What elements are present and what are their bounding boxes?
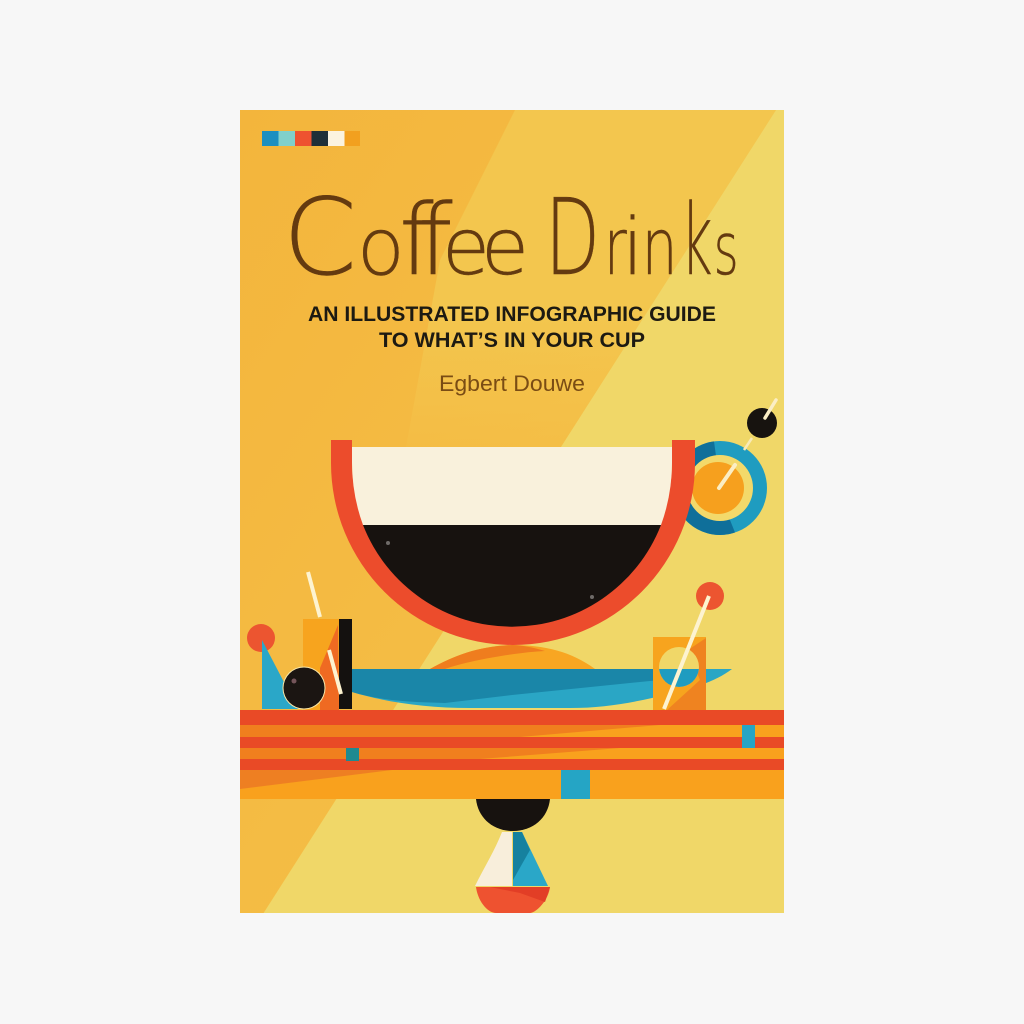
title: C [283, 176, 357, 299]
cup rim [331, 440, 695, 645]
black ball [282, 666, 326, 710]
sail right dark [513, 832, 530, 880]
title: f [418, 184, 453, 298]
cup [331, 440, 695, 669]
coffee [363, 525, 661, 627]
author: Egbert Douwe [439, 371, 585, 396]
milk foam [352, 447, 672, 525]
table stripes [240, 710, 784, 799]
blue cone [262, 640, 298, 709]
red circle [696, 582, 724, 610]
hole [659, 647, 699, 687]
subtitle [308, 306, 716, 347]
right glass group [653, 582, 724, 710]
palette strip [262, 131, 360, 146]
cover background [240, 110, 784, 950]
title: n [642, 203, 678, 293]
hull [476, 887, 550, 913]
sail right [513, 832, 548, 886]
title: e [481, 203, 529, 293]
sail left [475, 832, 512, 886]
icon: cup handle [673, 400, 777, 535]
red circle [247, 624, 275, 652]
bottom figure [475, 799, 550, 913]
title: i [622, 203, 644, 293]
title: o [357, 203, 405, 293]
subtitle: TO WHAT’S IN YOUR CUP [379, 329, 645, 352]
white straw [308, 572, 341, 694]
hull shading [490, 887, 550, 902]
title: e [442, 203, 490, 293]
title: k [681, 184, 713, 298]
saucer [352, 669, 732, 708]
book cover illustration [240, 110, 784, 913]
black bowl [476, 799, 550, 831]
title: D [545, 177, 600, 299]
saucer dome [430, 645, 595, 669]
white straw [664, 596, 709, 709]
left glass group [247, 572, 352, 710]
glass [653, 637, 706, 710]
title: f [399, 184, 434, 298]
glass shading [667, 638, 706, 710]
subtitle: AN ILLUSTRATED INFOGRAPHIC GUIDE [308, 303, 716, 326]
glass [303, 619, 339, 710]
small squares [346, 725, 755, 799]
title: r [604, 203, 627, 293]
title: s [714, 207, 739, 291]
black bar [339, 619, 352, 709]
